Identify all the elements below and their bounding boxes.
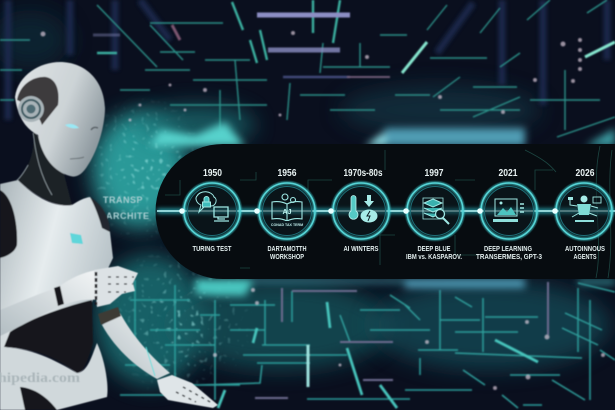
- milestone: 2026: [556, 168, 612, 261]
- blurred wall text: ARCHITE: [106, 211, 150, 221]
- robot: hip shadow: [20, 387, 57, 410]
- milestone: 1956: [259, 168, 315, 261]
- robot: dark shoulder: [0, 190, 17, 258]
- background: bottom circuit lines: [120, 280, 615, 408]
- panel faint circuit traces: [165, 146, 612, 278]
- node ring: [556, 183, 612, 239]
- robot: chest light: [70, 233, 83, 244]
- label: DEEP LEARNING: [484, 246, 532, 253]
- milestone: 1950: [184, 168, 240, 253]
- background: dim lavender columns: [8, 0, 607, 120]
- milestone: 1997: [406, 168, 463, 261]
- blurred wall text: [103, 195, 150, 221]
- icon: speech lock and computer: [196, 192, 229, 221]
- robot: wrist band: [54, 286, 64, 306]
- robot: raised forearm: [0, 270, 97, 336]
- icon: data stack and magnifier: [423, 198, 449, 224]
- label: AI WINTERS: [344, 246, 379, 253]
- robot: neck: [18, 130, 72, 205]
- node ring: [184, 183, 240, 239]
- icon: monitor with landscape: [493, 199, 524, 222]
- node ring: [259, 183, 315, 239]
- robot: raised hand: [94, 266, 138, 307]
- label line two: AGENTS: [574, 254, 597, 261]
- robot: head side cavity: [17, 77, 58, 125]
- panel background: [155, 144, 615, 279]
- icon: robot with tools: [568, 196, 601, 222]
- year: 1950: [203, 168, 222, 179]
- robot: lips: [70, 157, 84, 159]
- year: 1970s-80s: [344, 168, 383, 179]
- robot: ear disc: [18, 96, 44, 122]
- robot: neck strands: [16, 133, 52, 195]
- icon: thermometer, arrow and piggy cloud: [349, 195, 378, 222]
- label line two: TRANSERMES, GPT-3: [476, 254, 542, 261]
- milestone: 1970s-80s: [333, 168, 389, 253]
- connector nodes: [179, 208, 558, 214]
- robot figure: [0, 62, 218, 410]
- year: 2026: [576, 168, 595, 179]
- background: lavender bars: [93, 15, 350, 50]
- icon: open book with gears: AJ: [283, 209, 292, 216]
- robot: head shell: [15, 62, 105, 177]
- robot: lower arm: [102, 313, 170, 379]
- robot: eye: [65, 124, 79, 128]
- watermark: hipedia.com: [0, 371, 80, 386]
- robot: dark abdomen: [4, 300, 93, 373]
- background: glow below panel: [195, 279, 615, 296]
- panel: timeline: [155, 144, 615, 279]
- background: speckle texture: [94, 101, 247, 390]
- label: DARTAMOTTH: [268, 246, 306, 253]
- label: DEEP BLUE: [418, 246, 451, 253]
- node ring: [407, 183, 463, 239]
- robot: dark shoulder joint: [90, 197, 110, 232]
- robot: torso: [0, 180, 113, 350]
- connector line: [157, 208, 615, 214]
- year: 1956: [278, 168, 297, 179]
- label: AUTOINNOUS: [565, 246, 605, 253]
- background: top circuit lines: [0, 0, 615, 137]
- node ring: [333, 183, 389, 239]
- robot: lower hand: [157, 375, 218, 408]
- node ring: [481, 183, 537, 239]
- year: 2021: [498, 168, 518, 179]
- milestone: 2021: [476, 168, 542, 261]
- robot: lower arm glow line: [146, 347, 155, 376]
- blurred wall text: TRANSP: [103, 195, 143, 205]
- robot: lower wrist: [98, 307, 121, 325]
- label line two: IBM vs. KASPAROV.: [406, 254, 462, 261]
- label line two: WORKSHOP: [270, 254, 304, 261]
- year: 1997: [424, 168, 444, 179]
- robot: hip: [0, 343, 108, 410]
- background: bright glow above panel: [150, 122, 615, 146]
- label: TURING TEST: [192, 246, 232, 253]
- icon caption: CONAD TAX TERM: [271, 223, 303, 227]
- robot: eye right: [91, 127, 98, 130]
